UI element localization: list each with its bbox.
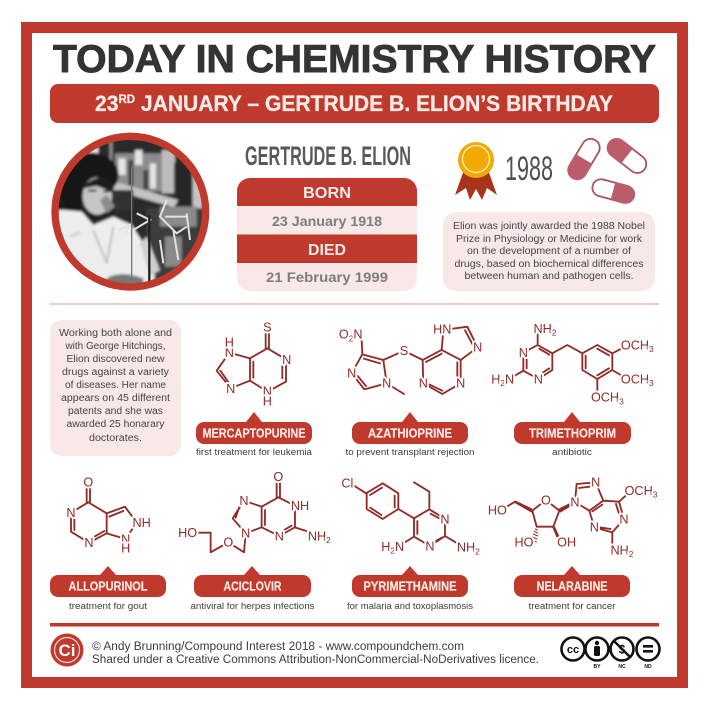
molecule: aciclovir: NH: [291, 499, 309, 513]
molecule: nelarabine: [488, 476, 658, 559]
label: mercaptopurine: [196, 412, 312, 457]
molecule: azathioprine: N: [473, 341, 482, 355]
born and died table: [237, 178, 417, 291]
molecule: azathioprine: N: [353, 328, 362, 342]
label: nelarabine: NELARABINE: [536, 580, 608, 594]
molecule: aciclovir: O: [273, 470, 283, 484]
molecule: aciclovir: N: [239, 494, 249, 508]
credits text: © Andy Brunning/Compound Interest 2018 - www.compoundchem.com: [92, 641, 464, 653]
molecule: nelarabine: 2: [629, 549, 634, 559]
molecule: azathioprine: HN: [433, 323, 451, 337]
molecule: azathioprine: N: [347, 367, 356, 381]
label: aciclovir: [190, 566, 315, 611]
molecule: pyrimethamine: 2: [475, 546, 480, 556]
molecule: pyrimethamine: NH: [457, 541, 475, 555]
career text box: drugs against a variety: [62, 367, 169, 378]
molecule: trimethoprim: OCH: [591, 391, 619, 405]
molecule: pyrimethamine: N: [425, 539, 435, 553]
career text box: with George Hitchings,: [64, 341, 166, 352]
molecule: trimethoprim: H: [491, 372, 500, 386]
credits text: Shared under a Creative Commons Attribution-NonCommercial-NoDerivatives licence.: [92, 654, 539, 666]
label: azathioprine: to prevent transplant rejection: [346, 447, 474, 457]
born and died table: 21 February 1999: [266, 270, 388, 285]
molecule: aciclovir: N: [275, 529, 284, 543]
nobel prize text box: Elion was jointly awarded the 1988 Nobel: [453, 221, 645, 232]
career text box: doctorates.: [89, 433, 142, 444]
molecule: azathioprine: O: [339, 328, 349, 342]
date banner: [50, 84, 659, 123]
date banner: RD: [118, 92, 135, 106]
molecule: azathioprine: N: [456, 377, 465, 391]
molecule: nelarabine: N: [619, 512, 629, 526]
molecule: allopurinol: [66, 476, 151, 556]
icon: compound interest logo: Ci: [58, 641, 76, 660]
icon: creative commons badges: cc: [567, 644, 579, 656]
molecule: pyrimethamine: [341, 477, 480, 556]
label: aciclovir: antiviral for herpes infections: [190, 601, 315, 611]
molecule: trimethoprim: NH: [534, 322, 552, 336]
label: pyrimethamine: PYRIMETHAMINE: [364, 580, 456, 594]
molecule: nelarabine: OH: [557, 536, 576, 550]
molecule: aciclovir: HO: [178, 526, 197, 540]
icon: compound interest logo: [50, 634, 84, 666]
molecule: trimethoprim: N: [505, 372, 514, 386]
label: nelarabine: treatment for cancer: [528, 601, 616, 611]
born and died table: DIED: [308, 242, 346, 259]
molecule: nelarabine: NH: [611, 543, 629, 557]
molecule: aciclovir: N: [241, 527, 250, 541]
molecule: pyrimethamine: Cl: [341, 477, 353, 491]
molecule: aciclovir: 2: [326, 535, 331, 545]
career text box: of diseases. Her name: [65, 380, 167, 391]
molecule: mercaptopurine: N: [263, 385, 272, 399]
icon: creative commons badges: ND: [644, 664, 652, 670]
label: allopurinol: [50, 566, 166, 611]
label: trimethoprim: antibiotic: [552, 447, 593, 457]
molecule: pyrimethamine: N: [395, 540, 404, 554]
nobel prize text box: [443, 212, 655, 291]
molecule: aciclovir: O: [223, 536, 233, 550]
label: nelarabine: [514, 566, 630, 611]
date banner: 23: [95, 91, 119, 116]
molecule: trimethoprim: 2: [552, 328, 557, 338]
molecule: azathioprine: N: [382, 377, 391, 391]
date banner: JANUARY – GERTRUDE B. ELION’S BIRTHDAY: [135, 91, 613, 116]
molecule: allopurinol: N: [66, 506, 76, 520]
nobel prize text box: on the development of a number of: [467, 246, 631, 257]
molecule: mercaptopurine: H: [263, 395, 272, 409]
icon: creative commons badges: BY: [594, 664, 601, 670]
label: allopurinol: ALLOPURINOL: [68, 580, 148, 594]
molecule: pyrimethamine: 2: [390, 546, 395, 556]
label: azathioprine: AZATHIOPRINE: [368, 426, 452, 440]
molecule: pyrimethamine: N: [440, 512, 450, 526]
molecule: nelarabine: N: [570, 495, 580, 509]
molecule: pyrimethamine: H: [381, 540, 390, 554]
born and died table: 23 January 1918: [272, 214, 383, 229]
molecule: nelarabine: HO: [488, 503, 507, 517]
nobel prize text box: between human and pathogen cells.: [464, 271, 634, 282]
icon: creative commons badges: NC: [618, 664, 626, 670]
career text box: awarded 25 honarary: [66, 419, 165, 430]
nobel prize text box: drugs, based on biochemical differences: [454, 259, 644, 270]
label: pyrimethamine: [347, 566, 474, 611]
molecule: allopurinol: H: [121, 542, 130, 556]
molecule: mercaptopurine: S: [263, 321, 272, 335]
career text box: Working both alone and: [59, 328, 172, 339]
label: mercaptopurine: first treatment for leukemia: [196, 447, 312, 457]
label: azathioprine: [346, 412, 474, 457]
molecule: mercaptopurine: N: [282, 353, 291, 367]
career text box: [50, 320, 181, 456]
molecule: trimethoprim: OCH: [621, 338, 649, 352]
molecule: trimethoprim: N: [534, 372, 543, 386]
molecule: mercaptopurine: [217, 321, 291, 409]
molecule: nelarabine: N: [590, 521, 599, 535]
title: TODAY IN CHEMISTRY HISTORY: [53, 38, 656, 81]
icon: creative commons badges: [562, 638, 660, 670]
molecule: nelarabine: OCH: [625, 484, 653, 498]
name heading: GERTRUDE B. ELION: [245, 141, 411, 171]
molecule: allopurinol: N: [121, 532, 130, 546]
molecule: azathioprine: N: [419, 377, 428, 391]
molecule: mercaptopurine: H: [225, 336, 234, 350]
molecule: azathioprine: 2: [349, 333, 354, 343]
molecule: nelarabine: HO: [514, 536, 534, 550]
label: trimethoprim: [514, 412, 631, 457]
molecule: aciclovir: NH: [308, 529, 326, 543]
molecule: mercaptopurine: N: [225, 346, 234, 360]
molecule: trimethoprim: N: [519, 346, 528, 360]
molecule: allopurinol: N: [84, 536, 94, 550]
nobel prize text box: Prize in Physiology or Medicine for work: [456, 234, 642, 245]
career text box: Elion discovered new: [66, 354, 165, 365]
molecule: trimethoprim: 3: [649, 344, 654, 354]
icon: medal: [455, 142, 497, 200]
career text box: appears on 45 different: [61, 393, 170, 404]
born and died table: BORN: [303, 185, 351, 202]
label: allopurinol: treatment for gout: [69, 601, 148, 611]
icon: creative commons badges: $: [619, 642, 626, 656]
molecule: trimethoprim: 3: [619, 396, 624, 406]
molecule: azathioprine: [339, 323, 482, 394]
credits text: [92, 641, 539, 666]
molecule: trimethoprim: 2: [500, 378, 505, 388]
molecule: nelarabine: 3: [653, 490, 658, 500]
molecule: azathioprine: S: [400, 344, 408, 358]
molecule: nelarabine: O: [541, 493, 551, 507]
molecule: trimethoprim: OCH: [621, 372, 649, 386]
label: aciclovir: ACICLOVIR: [224, 580, 282, 594]
molecule: allopurinol: O: [83, 476, 93, 490]
portrait photo: [50, 130, 215, 295]
label: trimethoprim: TRIMETHOPRIM: [529, 426, 616, 440]
molecule: trimethoprim: [491, 322, 654, 406]
year 1988: 1988: [505, 150, 553, 188]
molecule: trimethoprim: 3: [649, 378, 654, 388]
molecule: nelarabine: N: [591, 476, 600, 490]
career text box: patents and she was: [68, 406, 163, 417]
label: pyrimethamine: for malaria and toxoplasmosis: [347, 601, 474, 611]
molecule: mercaptopurine: N: [226, 382, 235, 396]
label: mercaptopurine: MERCAPTOPURINE: [202, 426, 306, 440]
molecule: aciclovir: [178, 470, 331, 552]
icon: pills: [564, 134, 650, 206]
molecule: allopurinol: NH: [133, 516, 151, 530]
